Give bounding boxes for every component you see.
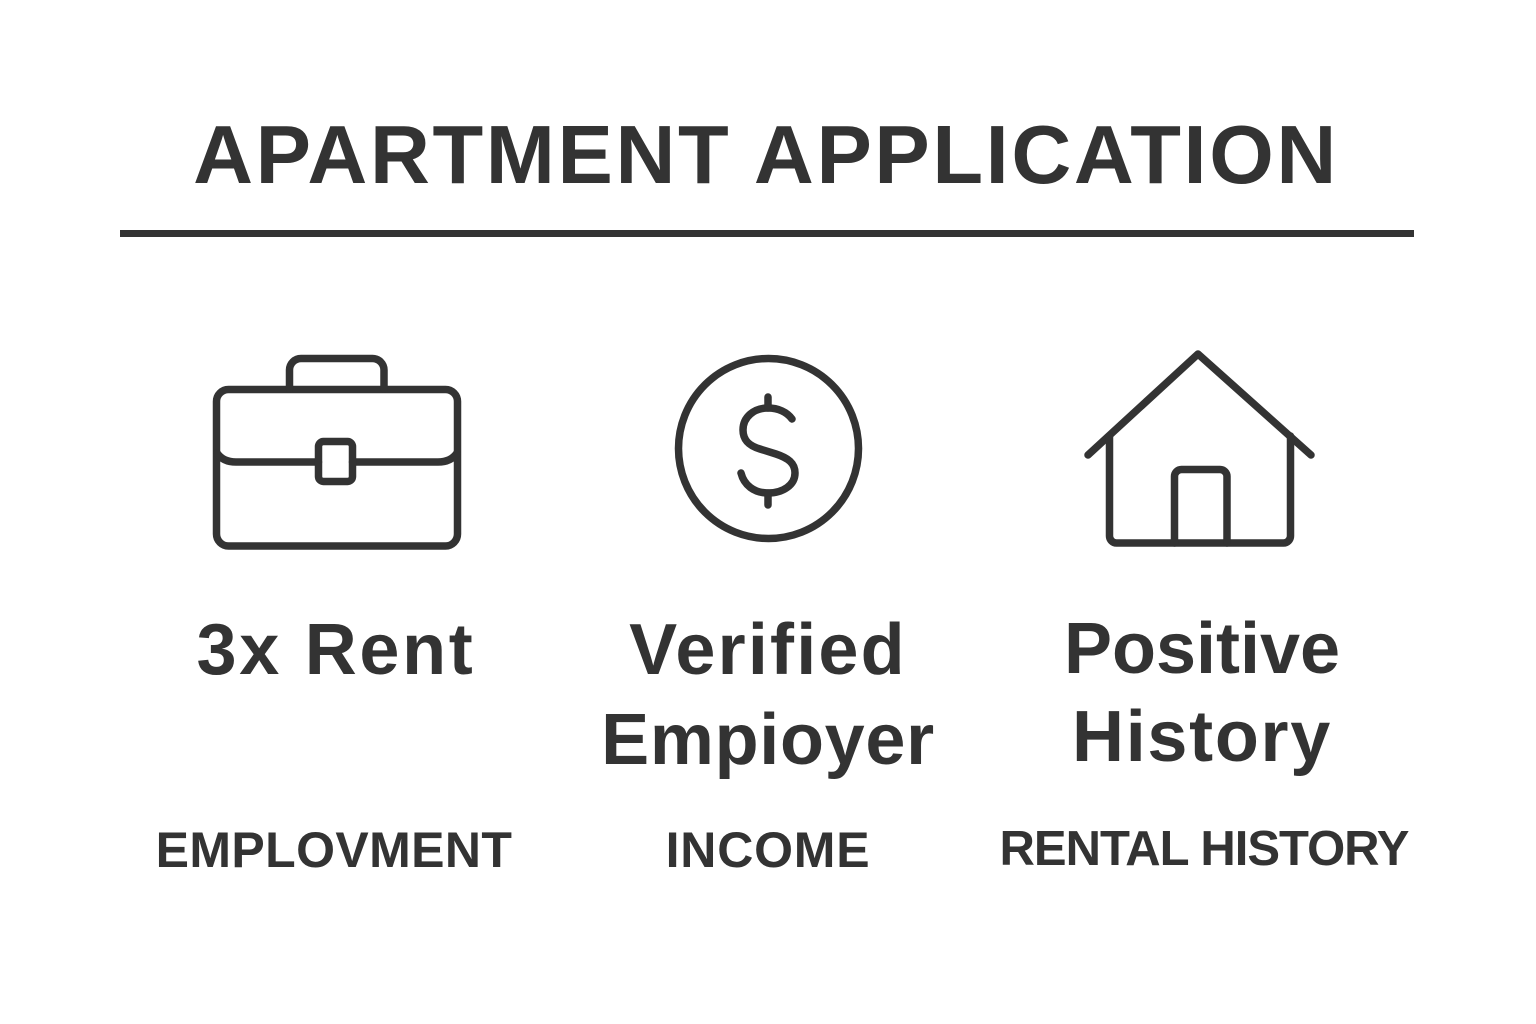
title: APARTMENT APPLICATION	[193, 108, 1339, 201]
icon: dollar coin	[674, 354, 862, 542]
text: Verified Employer: Verified	[629, 610, 907, 690]
text: Verified Employer: Empioyer	[601, 700, 935, 780]
label: rental history: RENTAL HISTORY	[1000, 822, 1408, 876]
text: Positive History: Positive	[1064, 609, 1340, 689]
text: 3x Rent: 3x Rent	[196, 610, 476, 690]
text: Positive History	[1064, 609, 1340, 777]
icon: briefcase	[212, 354, 462, 550]
text: Positive History: History	[1072, 697, 1332, 777]
label: employment: EMPLOVMENT	[156, 822, 512, 878]
text: Verified Employer	[601, 610, 935, 780]
icon: house	[1084, 350, 1315, 547]
label: income: INCOME	[666, 822, 870, 878]
